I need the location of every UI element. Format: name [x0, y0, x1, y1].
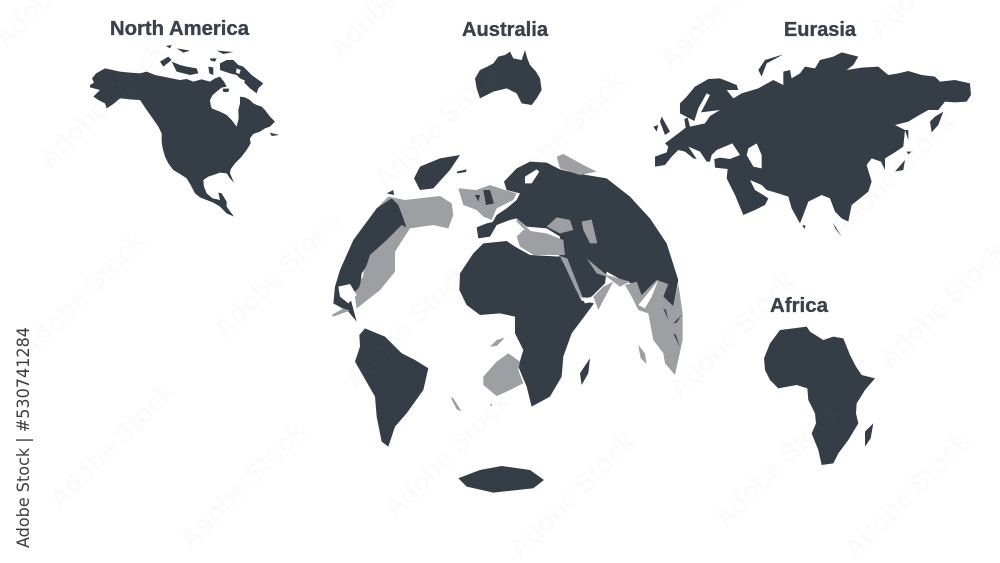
- watermarks: Adobe Stock: [378, 386, 517, 524]
- heading: Eurasia: Eurasia: [784, 19, 857, 41]
- watermarks: Adobe Stock: [173, 416, 312, 554]
- watermarks: Adobe Stock: [708, 396, 847, 534]
- map: North America: [90, 45, 279, 217]
- watermarks: Adobe Stock: [43, 376, 182, 514]
- globe: Antarctica: [458, 466, 544, 493]
- map: Africa: [764, 327, 875, 465]
- watermarks: Adobe Stock: [208, 206, 347, 344]
- globe: small grey islands: [451, 338, 647, 412]
- globe: Australia overlay: [483, 353, 523, 396]
- watermarks: Adobe Stock: [368, 56, 507, 194]
- heading: Africa: Africa: [770, 295, 829, 317]
- globe: South America: [355, 328, 428, 447]
- globe: Eurasia land: [458, 154, 683, 375]
- credit: stock number: Adobe Stock | #530741284: [14, 327, 34, 548]
- globe: Africa: [459, 241, 594, 407]
- globe: North America: [332, 196, 453, 322]
- watermarks: Adobe Stock: [823, 106, 962, 244]
- map: Australia: [475, 50, 542, 105]
- watermarks: Adobe Stock: [503, 426, 642, 563]
- heading: Australia: Australia: [462, 19, 549, 41]
- watermarks: Adobe Stock: [493, 66, 632, 204]
- watermarks: Adobe Stock: [33, 36, 172, 174]
- globe: centre world map: [332, 154, 683, 493]
- map: Eurasia: [653, 52, 971, 237]
- globe: Madagascar: [580, 358, 590, 385]
- watermarks: Adobe Stock: [663, 266, 802, 404]
- watermarks: Adobe Stock: [13, 226, 152, 364]
- globe: Greenland and Iceland: [387, 155, 467, 195]
- heading: North America: North America: [110, 18, 250, 40]
- globe: Gulf of Aden: [582, 297, 593, 303]
- watermarks: Adobe Stock: [338, 256, 477, 394]
- watermarks: Adobe Stock: [838, 426, 977, 563]
